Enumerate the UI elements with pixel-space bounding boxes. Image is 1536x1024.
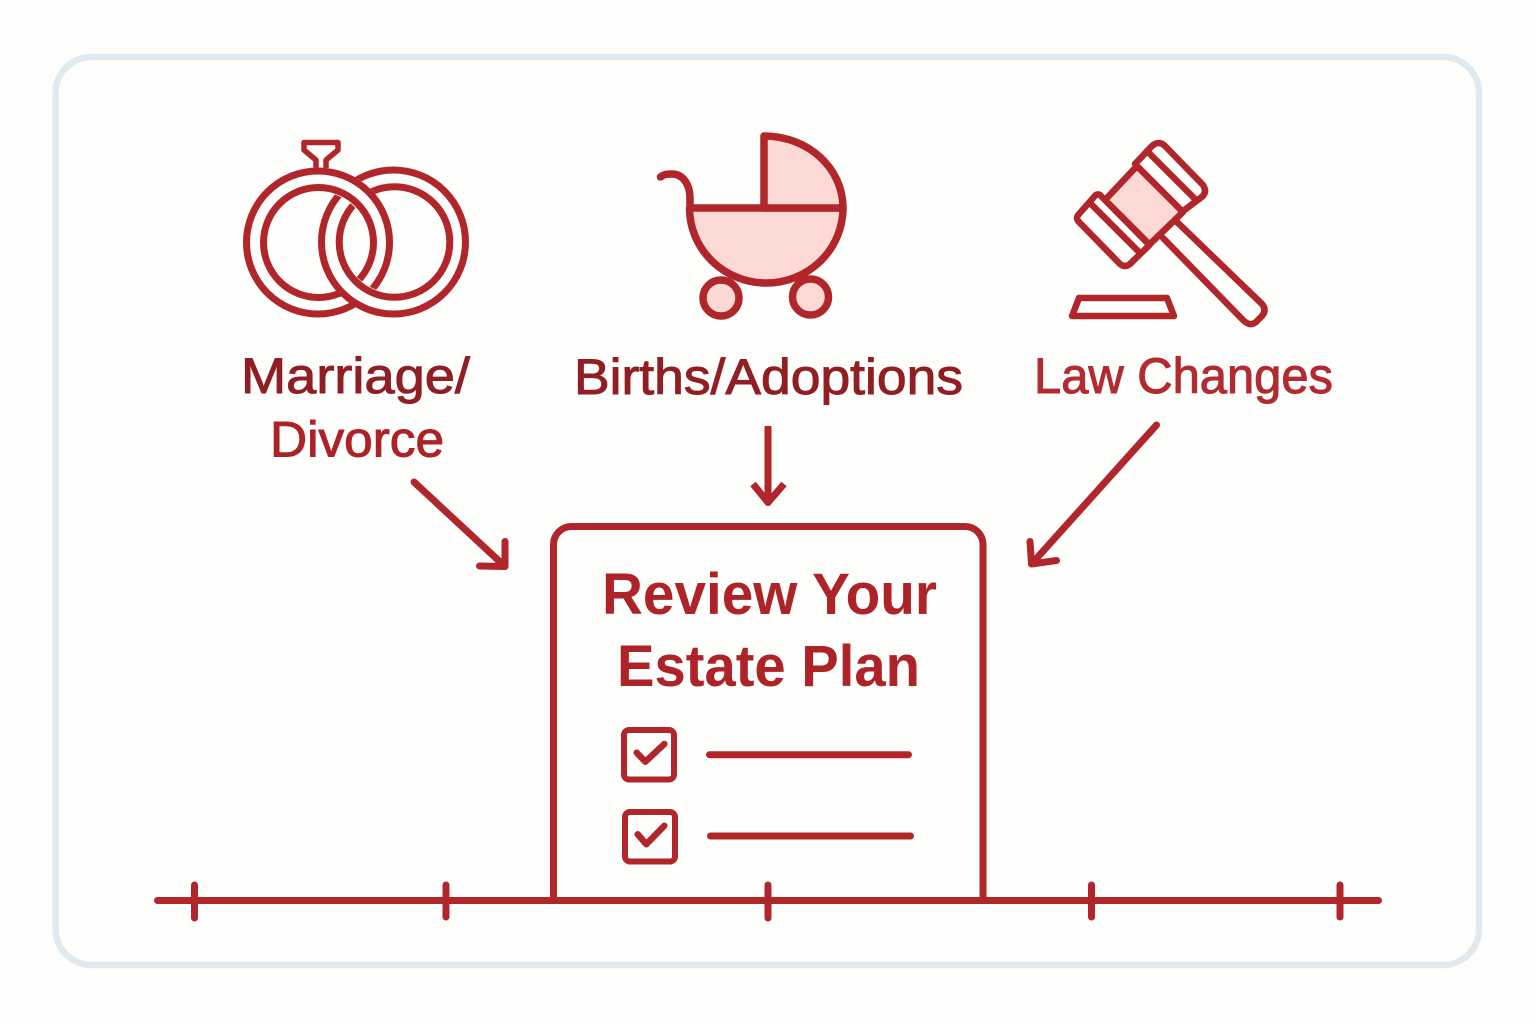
left wheel [703,280,739,316]
heading: review your estate plan: Estate Plan [617,634,920,699]
label: marriage divorce: Divorce [270,412,444,468]
label: marriage divorce: Marriage/ [241,348,470,404]
stroller basket [690,208,843,283]
gavel handle [1163,222,1264,324]
icon: wedding rings [246,142,466,314]
left ring [246,171,390,314]
arrow: marriage to review [414,482,505,566]
stroller handle [660,174,690,208]
label: law changes: Law Changes [1034,348,1333,404]
heading: review your estate plan: Review Your [602,562,937,627]
timeline [158,885,1378,918]
checklist item one [624,730,908,780]
gavel head center [1105,166,1183,244]
gavel lower cap [1077,194,1150,266]
panel: checklist box [554,526,983,900]
label: marriage divorce [241,348,470,468]
right ring [322,170,466,314]
icon: gavel [1072,143,1264,324]
heading: review your estate plan [602,562,937,699]
icon: baby stroller [660,136,843,316]
arrow: births to review [753,426,784,502]
box outline [554,526,983,900]
left ring overlap [243,168,393,242]
label: births adoptions: Births/Adoptions [574,349,963,405]
gavel sound block [1072,298,1174,316]
right wheel [792,279,828,315]
ring setting [304,142,338,168]
arrow: law changes to review [1030,425,1156,564]
checklist item two [625,812,910,862]
gavel upper cap [1135,143,1205,212]
stroller hood [764,136,843,208]
